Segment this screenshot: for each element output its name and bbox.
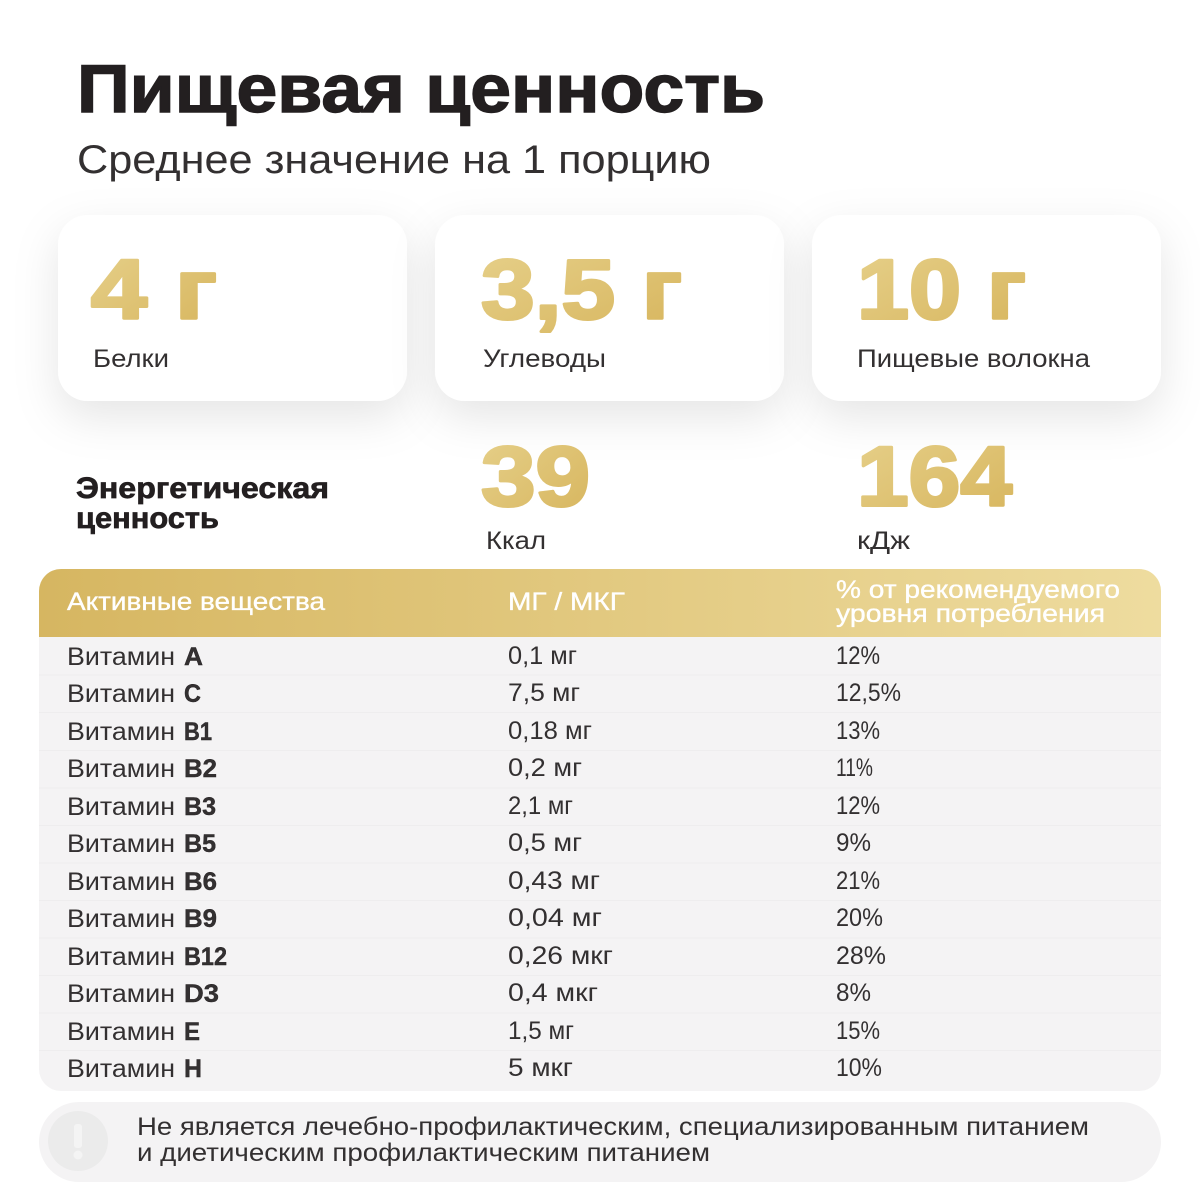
row: vitamin B5: 9% — [836, 829, 871, 857]
panel: protein card: 4 г — [91, 242, 217, 336]
row: vitamin B5: B5 — [184, 830, 216, 858]
energy value heading — [76, 472, 329, 535]
row: vitamin B2: 11% — [836, 754, 873, 782]
row: vitamin D3: Витамин — [67, 980, 175, 1008]
row: vitamin H: Витамин — [67, 1055, 175, 1083]
row: vitamin B2: B2 — [184, 755, 217, 783]
row: vitamin B12: 28% — [836, 942, 886, 970]
row: vitamin B9: 0,04 мг — [508, 904, 602, 932]
row: vitamin D3: D3 — [184, 980, 219, 1008]
row: vitamin B6 — [67, 867, 880, 896]
row: vitamin E: E — [184, 1018, 200, 1046]
table header: % от рекомендуемого — [836, 576, 1120, 604]
row: vitamin H: 5 мкг — [508, 1054, 573, 1082]
energy value: kJ: 164 — [857, 430, 1012, 524]
row: vitamin D3: 0,4 мкг — [508, 979, 598, 1007]
row: vitamin B9: B9 — [184, 905, 217, 933]
row: vitamin A: 0,1 мг — [508, 642, 577, 670]
panel: disclaimer — [39, 1102, 1161, 1182]
table header: уровня потребления — [836, 600, 1105, 628]
row: vitamin B3: Витамин — [67, 793, 175, 821]
row: vitamin B1: 13% — [836, 717, 880, 745]
row: vitamin B9: 20% — [836, 904, 883, 932]
row: vitamin C — [67, 679, 901, 708]
row: vitamin B2: Витамин — [67, 755, 175, 783]
table: active substances — [39, 569, 1161, 1091]
disclaimer text: Не является лечебно-профилактическим, специализированным питанием — [137, 1113, 1089, 1141]
table header: Активные вещества — [67, 588, 325, 616]
row: vitamin B6: Витамин — [67, 868, 175, 896]
energy value: kcal: Ккал — [486, 527, 546, 555]
row: vitamin B1: 0,18 мг — [508, 717, 592, 745]
row: vitamin C: C — [184, 680, 201, 708]
row: vitamin A: Витамин — [67, 643, 175, 671]
energy value: kJ: кДж — [857, 527, 910, 555]
panel: carbohydrates card: Углеводы — [483, 345, 606, 373]
row: vitamin E: 1,5 мг — [508, 1017, 574, 1045]
row: vitamin C: 7,5 мг — [508, 679, 580, 707]
table body background — [39, 620, 1161, 1091]
row: vitamin B6: 21% — [836, 867, 880, 895]
row: vitamin C: Витамин — [67, 680, 175, 708]
title: Пищевая ценность — [77, 51, 765, 127]
row: vitamin B2 — [67, 754, 873, 783]
row: vitamin B9: Витамин — [67, 905, 175, 933]
row: vitamin E — [67, 1017, 880, 1046]
panel: dietary fibre card: 10 г — [857, 242, 1026, 336]
row: vitamin B6: B6 — [184, 868, 217, 896]
row: vitamin A: A — [184, 643, 203, 671]
row: vitamin E: 15% — [836, 1017, 880, 1045]
row: vitamin B5 — [67, 829, 871, 858]
row: vitamin B12: B12 — [184, 943, 227, 971]
table header — [39, 569, 1161, 637]
row: vitamin B1: Витамин — [67, 718, 175, 746]
panel: carbohydrates card: 3,5 г — [481, 242, 682, 336]
panel: protein card: Белки — [93, 345, 169, 373]
row: vitamin H: 10% — [836, 1054, 882, 1082]
table header: МГ / МКГ — [508, 588, 626, 616]
energy value heading: Энергетическая — [76, 472, 329, 505]
row: vitamin B5: 0,5 мг — [508, 829, 582, 857]
row: vitamin H — [67, 1054, 882, 1083]
panel: dietary fibre card — [812, 215, 1161, 401]
panel: protein card — [58, 215, 407, 401]
row: vitamin B2: 0,2 мг — [508, 754, 582, 782]
disclaimer text — [137, 1113, 1089, 1167]
disclaimer text: и диетическим профилактическим питанием — [137, 1139, 710, 1167]
panel: carbohydrates card — [435, 215, 784, 401]
row: vitamin B1: B1 — [184, 718, 212, 746]
subtitle: Среднее значение на 1 порцию — [77, 138, 711, 182]
row: vitamin B5: Витамин — [67, 830, 175, 858]
row: vitamin B3 — [67, 792, 880, 821]
row: vitamin B3: 12% — [836, 792, 880, 820]
panel: dietary fibre card: Пищевые волокна — [857, 345, 1090, 373]
icon: exclamation mark — [48, 1111, 108, 1171]
energy value heading: ценность — [76, 502, 219, 535]
row: vitamin B9 — [67, 904, 883, 933]
row: vitamin D3 — [67, 979, 871, 1008]
row: vitamin C: 12,5% — [836, 679, 901, 707]
row: vitamin D3: 8% — [836, 979, 871, 1007]
row: vitamin B12 — [67, 942, 886, 971]
energy value: kcal — [481, 430, 590, 555]
row: vitamin A: 12% — [836, 642, 880, 670]
row: vitamin E: Витамин — [67, 1018, 175, 1046]
row: vitamin B3: B3 — [184, 793, 216, 821]
row: vitamin A — [67, 642, 880, 671]
row: vitamin B1 — [67, 717, 880, 746]
row: vitamin B6: 0,43 мг — [508, 867, 600, 895]
row: vitamin B3: 2,1 мг — [508, 792, 573, 820]
row: vitamin B12: 0,26 мкг — [508, 942, 613, 970]
row: vitamin B12: Витамин — [67, 943, 175, 971]
energy value: kcal: 39 — [481, 430, 590, 524]
row: vitamin H: H — [184, 1055, 202, 1083]
energy value: kJ — [857, 430, 1012, 555]
